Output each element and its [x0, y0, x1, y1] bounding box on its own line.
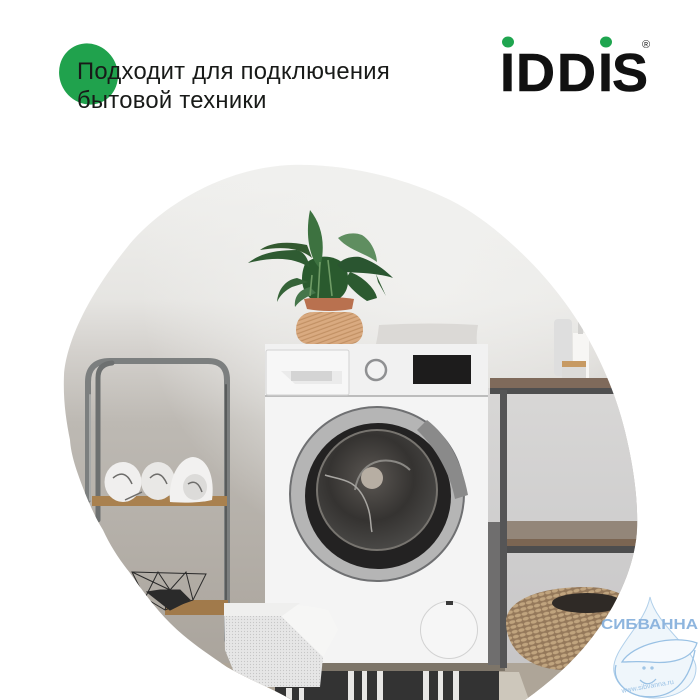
wall soft light — [196, 260, 607, 488]
drawer handle — [281, 371, 342, 384]
panel: laundry room photo blob — [64, 165, 638, 700]
wicker basket — [506, 587, 620, 670]
rolled towels — [104, 457, 213, 503]
watermark bathtub face — [615, 640, 697, 697]
door ring — [290, 407, 464, 581]
logo green dots — [502, 36, 612, 48]
washing machine — [265, 344, 488, 663]
door inner black — [305, 423, 451, 569]
green blob behind heading — [48, 33, 129, 115]
wall background — [50, 160, 650, 700]
wall right of washer — [488, 388, 637, 663]
plant pot — [296, 297, 363, 344]
floor — [221, 663, 570, 700]
striped rug — [275, 671, 529, 700]
folded towel — [376, 324, 478, 344]
door glass — [317, 430, 437, 550]
door handle — [417, 420, 468, 499]
IDDIS logo — [500, 36, 650, 103]
registered mark: ® — [642, 39, 650, 51]
detergent drawer — [266, 350, 349, 395]
lower wooden shelf — [165, 600, 228, 615]
heading: бытовой техники — [77, 87, 267, 114]
wire bowl — [132, 572, 206, 610]
watermark drop — [614, 597, 696, 698]
bottles — [554, 319, 589, 378]
drum hub — [361, 467, 383, 489]
laundry hamper — [224, 603, 323, 687]
display — [413, 355, 471, 384]
left metal rack — [88, 361, 227, 640]
watermark url: www.sibvanna.ru — [620, 679, 675, 695]
heading: Подходит для подключения — [77, 58, 390, 85]
watermark name: СИБВАННА — [601, 616, 698, 633]
logo wordmark: IDDIS — [500, 43, 648, 103]
watermark: Sibvanna — [601, 597, 698, 698]
upper wooden shelf — [92, 496, 227, 506]
right table — [488, 378, 640, 668]
control knob — [366, 360, 386, 380]
service hatch — [420, 602, 478, 658]
washer body — [265, 344, 488, 395]
plant leaves — [248, 210, 393, 307]
